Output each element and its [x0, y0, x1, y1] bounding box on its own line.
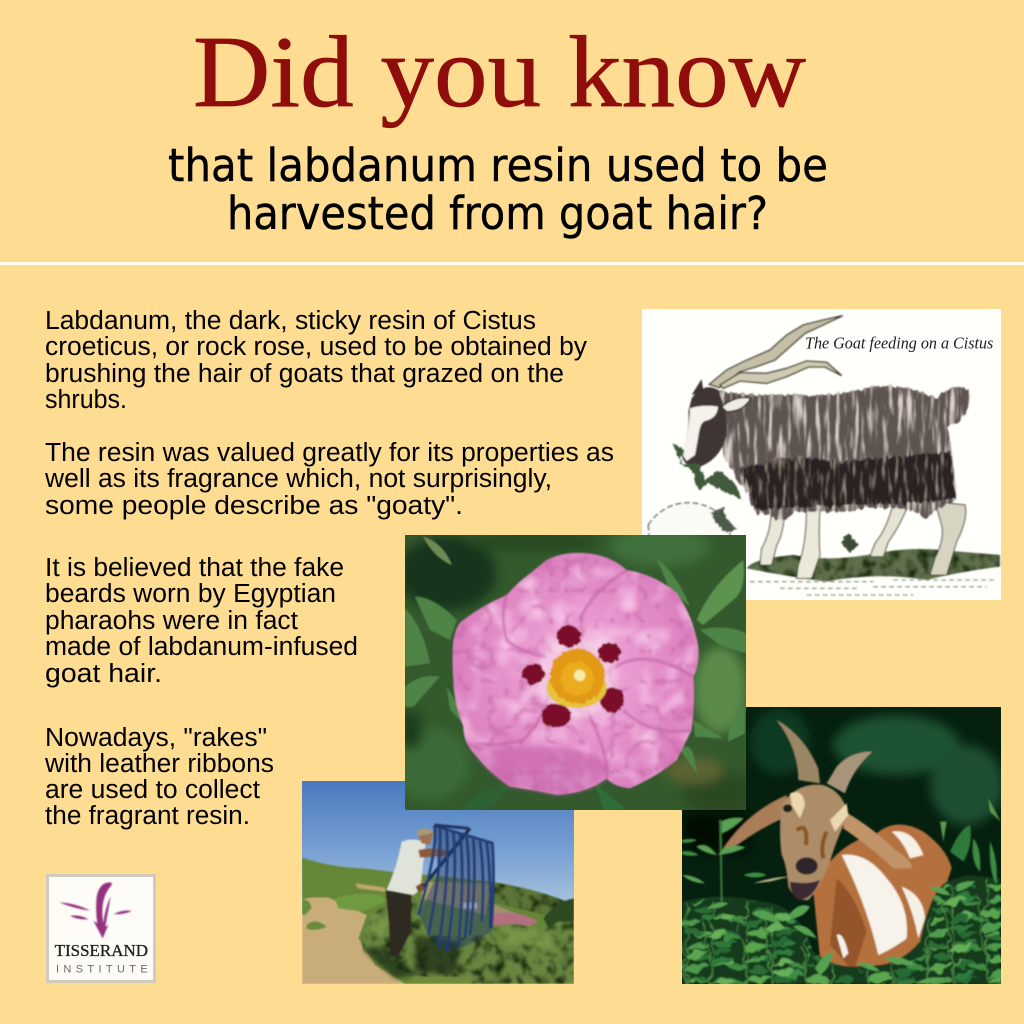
subtitle: that labdanum resin used to be — [168, 139, 828, 192]
foreground shrub leaves — [680, 878, 1002, 987]
foreground shrubs — [360, 898, 574, 984]
text block: pharaoh beards: beards worn by Egyptian — [45, 580, 336, 608]
petals — [452, 553, 699, 795]
man arm — [418, 849, 448, 858]
pistil — [574, 670, 585, 681]
hills — [302, 858, 574, 984]
man trousers — [386, 890, 412, 957]
yellow stamen halo — [547, 667, 607, 708]
lower horn — [720, 361, 842, 388]
cistus shrub — [648, 503, 730, 545]
rake ribbons — [418, 826, 494, 952]
bush shadow — [363, 935, 462, 978]
text block: labdanum origin: brushing the hair of goats that grazed on the — [45, 360, 564, 388]
text block: pharaoh beards: It is believed that the fake — [45, 554, 344, 582]
goat ear — [722, 398, 751, 412]
dark forest background — [682, 708, 1003, 852]
cistus sprig — [672, 443, 742, 500]
lower petal shade — [477, 747, 608, 795]
text block: pharaoh beards: made of labdanum-infused — [45, 633, 358, 661]
text block: labdanum origin: croeticus, or rock rose, used to be obtained by — [45, 333, 587, 361]
text block: resin fragrance — [44, 439, 614, 520]
photo: pink rock rose cistus flower — [405, 535, 746, 810]
left shrubs — [335, 894, 387, 912]
man shirt — [387, 840, 426, 895]
sparse upper leaves — [682, 798, 1001, 984]
legs — [760, 505, 785, 565]
white divider — [0, 262, 1024, 265]
fleece body — [717, 386, 969, 522]
head — [780, 785, 848, 900]
text block: pharaoh beards — [45, 554, 358, 688]
white body patches — [842, 855, 907, 955]
dark red petal spots — [522, 625, 624, 728]
horns — [777, 720, 820, 783]
logo mark — [59, 882, 132, 938]
engraving caption: The Goat feeding on a Cistus — [805, 333, 993, 352]
pale centre glow — [537, 638, 617, 718]
white building — [463, 903, 477, 909]
logo subline: INSTITUTE — [56, 964, 148, 976]
orange stamens — [550, 649, 605, 703]
rake ribbon mass — [419, 826, 493, 952]
text block: modern rakes: the fragrant resin. — [45, 802, 250, 830]
subtitle — [168, 139, 828, 240]
logo: Tisserand Institute — [46, 874, 156, 983]
right dark shrub — [543, 898, 574, 935]
title: Did you know — [193, 16, 806, 129]
illustration: engraving of goat feeding on cistus — [642, 309, 1001, 600]
text block: modern rakes: are used to collect — [45, 776, 260, 804]
goat head — [682, 387, 727, 468]
bush highlights — [368, 908, 562, 948]
foreground shrub base — [682, 875, 1000, 984]
photo: goat among green shrubs — [682, 707, 1001, 984]
text block: labdanum origin — [45, 307, 587, 414]
subtitle: harvested from goat hair? — [227, 187, 768, 240]
rake top tie — [434, 825, 468, 828]
text block: pharaoh beards: pharaohs were in fact — [45, 607, 298, 635]
pink flowers — [490, 913, 538, 928]
text block: resin fragrance: The resin was valued greatly for its properties as — [45, 439, 614, 467]
upper horn — [709, 316, 843, 388]
text block: pharaoh beards: goat hair. — [45, 660, 162, 688]
sky — [302, 781, 574, 914]
text block: modern rakes: with leather ribbons — [44, 750, 274, 778]
bottom grass — [412, 977, 472, 984]
text block: resin fragrance: well as its fragrance which, not surprisingly, — [44, 465, 552, 493]
fleece dark underside — [740, 452, 955, 508]
ground — [747, 549, 1000, 582]
muzzle — [796, 857, 818, 875]
dirt path — [302, 897, 405, 984]
photo: man using rake on cistus shrubs — [302, 781, 574, 984]
petal overlap shadows — [477, 570, 693, 778]
text block: labdanum origin: Labdanum, the dark, sticky resin of Cistus — [45, 307, 536, 335]
text block: labdanum origin: shrubs. — [45, 386, 127, 414]
dark flank shading — [830, 878, 867, 972]
ears — [720, 795, 787, 853]
blurred foliage background — [390, 527, 757, 817]
text block: resin fragrance: some people describe as "goaty". — [45, 492, 463, 520]
leaves — [405, 537, 746, 810]
rake handle — [423, 828, 470, 887]
goat body — [813, 825, 952, 982]
man head and cap — [417, 829, 433, 845]
text block: modern rakes — [44, 724, 274, 830]
logo wordmark: TISSERAND — [55, 941, 148, 960]
text block: modern rakes: Nowadays, "rakes" — [45, 724, 267, 752]
ground hatching — [750, 580, 997, 595]
